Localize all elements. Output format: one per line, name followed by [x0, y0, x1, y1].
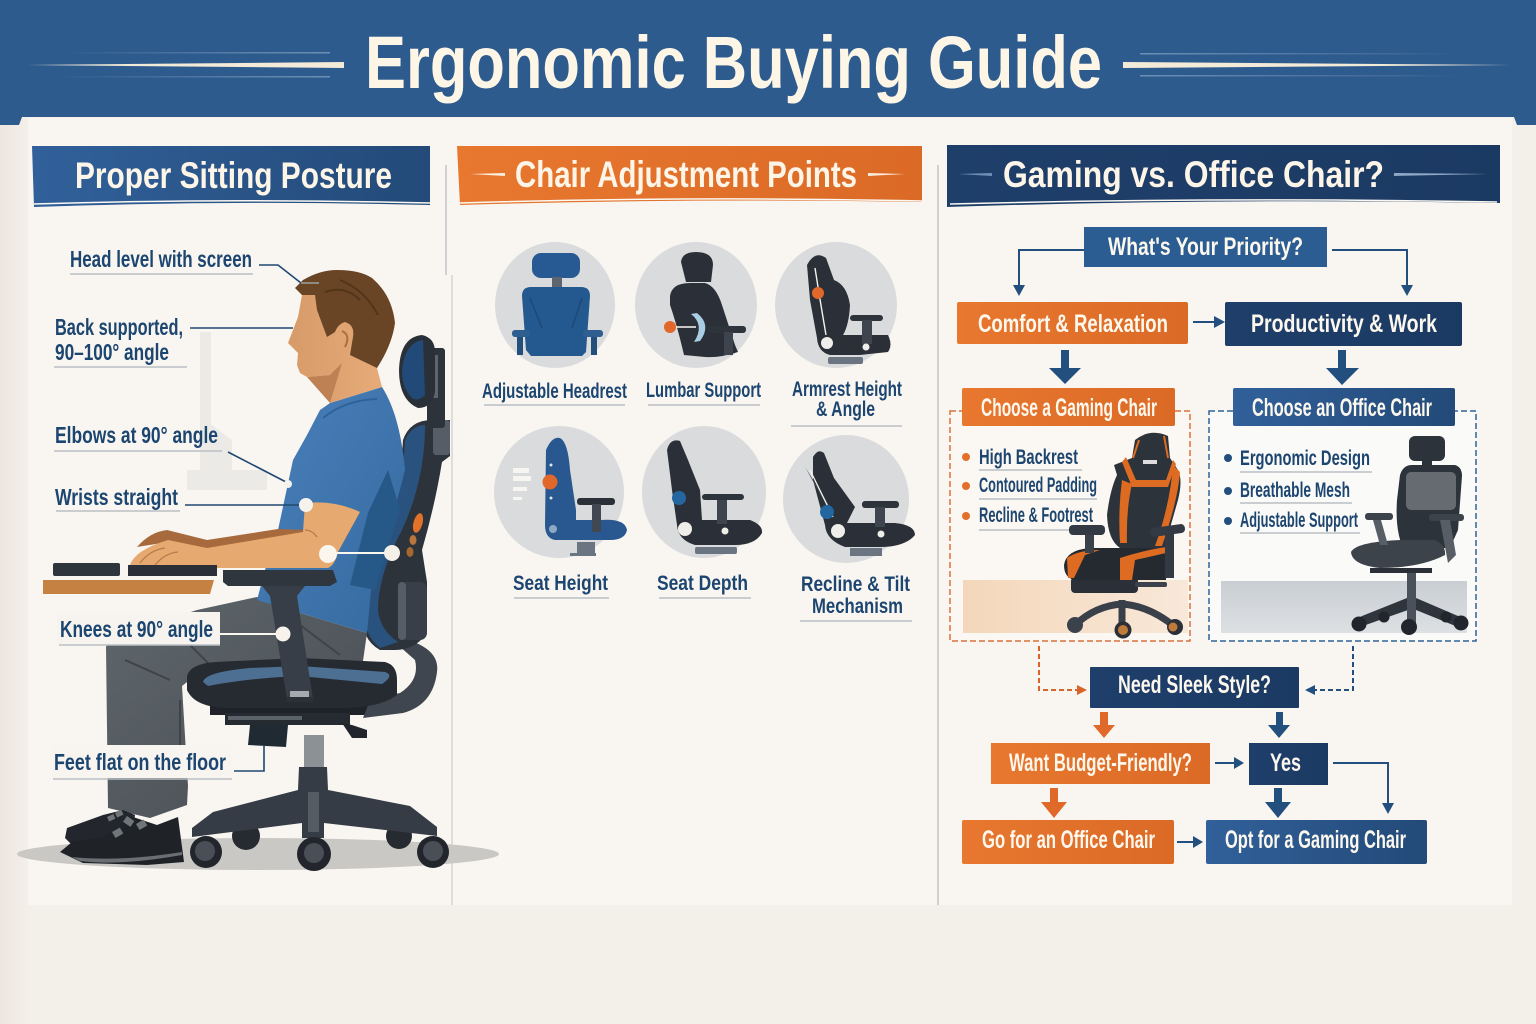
node: productivity and work: Productivity & Work	[1251, 310, 1437, 338]
node: want budget-friendly	[991, 743, 1210, 784]
node: want budget-friendly: Want Budget-Friendly?	[1009, 749, 1192, 777]
icon: headrest chair	[495, 242, 615, 368]
card heading: choose a gaming chair	[962, 388, 1175, 426]
item: recline and tilt mechanism	[783, 435, 915, 621]
icon: seat depth chair	[642, 426, 766, 558]
arrow: sleek style to budget	[1093, 712, 1115, 738]
chair base	[190, 735, 449, 871]
arrow: comfort down	[1049, 350, 1081, 384]
node: productivity and work	[1225, 302, 1462, 346]
arrow: priority to comfort	[1013, 250, 1084, 296]
icon: armrest chair	[775, 242, 897, 368]
header banner	[0, 0, 1536, 125]
main content sheet	[28, 118, 1512, 905]
chair seat	[187, 658, 397, 708]
trousers	[106, 597, 367, 818]
card: gaming chair	[950, 388, 1190, 641]
chair back hoop	[363, 640, 437, 718]
item: armrest height and angle: Armrest Height	[792, 378, 902, 401]
icon: lumbar chair	[635, 242, 757, 368]
card heading: choose a gaming chair: Choose a Gaming Chair	[981, 394, 1157, 422]
arrow: office dashed to sleek style	[1305, 646, 1353, 695]
node: yes: Yes	[1270, 749, 1301, 777]
arrow: sleek style to yes	[1268, 712, 1290, 738]
item: seat height: Seat Height	[513, 572, 608, 595]
node: need sleek style: Need Sleek Style?	[1118, 671, 1271, 699]
chair under-seat mechanism	[210, 705, 370, 747]
feature list: office: Ergonomic Design	[1240, 447, 1370, 470]
arm and hand	[130, 502, 360, 570]
node: yes	[1249, 743, 1328, 785]
illustration: seated person	[106, 270, 405, 818]
callout: head level with screen	[70, 246, 319, 283]
node: what's your priority	[1084, 227, 1327, 267]
item: armrest height and angle	[775, 242, 902, 426]
heading: proper sitting posture	[32, 146, 430, 207]
monitor ghost	[187, 332, 267, 490]
item: armrest height and angle: & Angle	[816, 398, 875, 421]
icon: seat height chair	[494, 426, 627, 558]
node: opt for a gaming chair	[1206, 820, 1427, 864]
chair backrest	[363, 420, 450, 650]
feature list: office	[1224, 447, 1372, 533]
node: go for an office chair: Go for an Office Chair	[982, 826, 1155, 854]
panel: gaming vs office chair	[947, 145, 1500, 864]
heading: gaming vs office chair	[947, 145, 1500, 207]
callout: knees at 90 degrees: Knees at 90° angle	[60, 616, 213, 642]
item: lumbar support	[635, 242, 761, 405]
callout: wrists straight: Wrists straight	[55, 484, 178, 510]
illustration: office chair	[1351, 436, 1468, 635]
arrow: yes to gaming chair	[1333, 763, 1394, 814]
shirt	[257, 387, 405, 633]
node: go for an office chair	[962, 820, 1174, 864]
shoes	[60, 810, 184, 865]
item: seat depth	[642, 426, 766, 598]
arrow: yes down	[1265, 788, 1291, 818]
callout: knees at 90 degrees	[57, 612, 290, 645]
card heading: choose an office chair: Choose an Office Chair	[1252, 394, 1432, 422]
arrow: budget to yes	[1215, 757, 1244, 769]
heading: proper sitting posture: Proper Sitting Posture	[75, 155, 392, 196]
callout: elbows at 90 degrees: Elbows at 90° angle	[55, 422, 218, 448]
desk with keyboard	[43, 563, 217, 594]
callout: feet flat on the floor: Feet flat on the floor	[54, 749, 226, 775]
item: adjustable headrest	[482, 242, 627, 405]
node: comfort and relaxation: Comfort & Relaxation	[978, 310, 1168, 338]
item: lumbar support: Lumbar Support	[646, 379, 761, 402]
arrow: office chair to gaming chair	[1177, 836, 1203, 848]
heading: chair adjustment points	[457, 146, 922, 205]
feature list: gaming: Contoured Padding	[979, 474, 1097, 497]
item: recline and tilt mechanism: Recline & Tilt	[801, 573, 910, 596]
jaw shadow	[307, 363, 342, 403]
chair headrest	[399, 335, 445, 428]
feature list: gaming: High Backrest	[979, 446, 1078, 469]
card heading: choose an office chair	[1233, 388, 1455, 426]
chair armrest	[223, 570, 337, 702]
illustration: office chair side view	[190, 335, 450, 871]
title: Ergonomic Buying Guide	[365, 21, 1102, 104]
feature list: office: Breathable Mesh	[1240, 479, 1350, 502]
node: opt for a gaming chair: Opt for a Gaming Chair	[1225, 826, 1406, 854]
panel: proper sitting posture	[17, 146, 499, 871]
item: seat depth: Seat Depth	[657, 572, 748, 595]
node: comfort and relaxation	[957, 302, 1188, 344]
item: recline and tilt mechanism: Mechanism	[812, 595, 903, 618]
callout: head level with screen: Head level with screen	[70, 246, 252, 272]
item: adjustable headrest: Adjustable Headrest	[482, 380, 627, 403]
feature list: office: Adjustable Support	[1240, 509, 1358, 532]
ear	[335, 324, 355, 352]
card: office chair	[1209, 388, 1476, 641]
callout: wrists straight	[55, 484, 313, 512]
node: what's your priority: What's Your Priority?	[1108, 233, 1303, 261]
arrow: budget to office chair	[1041, 788, 1067, 818]
markers: elbow to lumbar	[319, 545, 400, 563]
callout: back supported: Back supported,	[55, 314, 183, 340]
icon: recline chair	[783, 435, 915, 563]
arrow: productivity down	[1326, 350, 1359, 385]
feature list: gaming	[962, 446, 1097, 530]
panel: chair adjustment points	[457, 146, 922, 621]
arrow: comfort to productivity	[1193, 316, 1225, 328]
feature list: gaming: Recline & Footrest	[979, 504, 1093, 527]
left margin shade	[0, 118, 28, 1024]
callout: elbows at 90 degrees	[54, 422, 292, 488]
heading: chair adjustment points: Chair Adjustment Points	[515, 154, 857, 195]
illustration: gaming chair	[1064, 433, 1186, 638]
panel dividers	[445, 165, 939, 905]
hair	[295, 270, 395, 368]
arrow: priority to productivity	[1332, 250, 1413, 296]
heading: gaming vs office chair: Gaming vs. Office Chair?	[1003, 154, 1384, 195]
callout: back supported: 90–100° angle	[55, 339, 169, 365]
item: seat height	[494, 426, 627, 598]
node: need sleek style	[1090, 667, 1299, 708]
floor shadow	[17, 838, 499, 870]
callout: back supported	[54, 314, 293, 367]
neck and face	[288, 290, 382, 403]
arrow: gaming dashed to sleek style	[1039, 646, 1087, 695]
